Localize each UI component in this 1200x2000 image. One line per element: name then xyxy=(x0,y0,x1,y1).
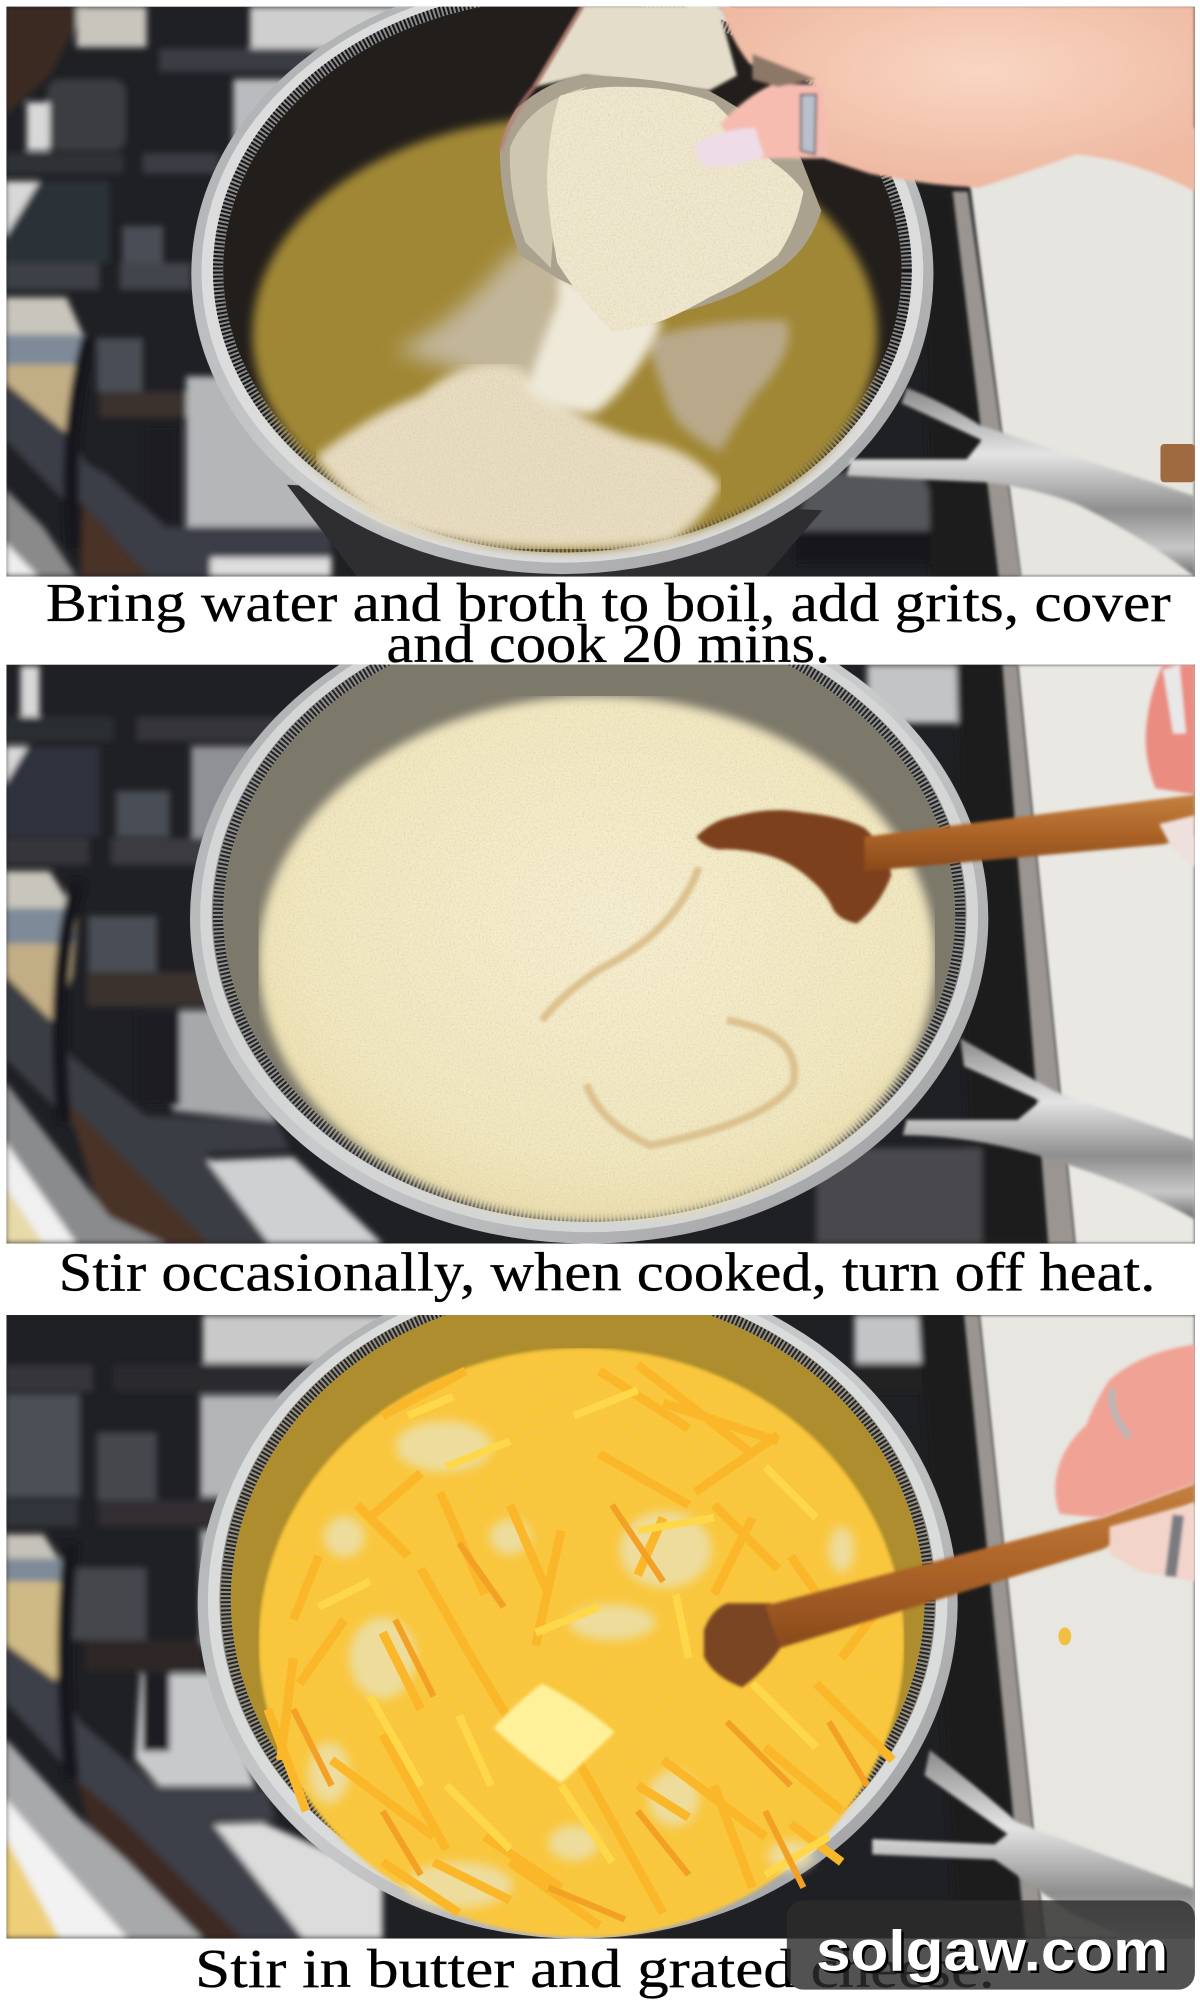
pan handle xyxy=(847,388,1195,577)
grits patches xyxy=(309,1421,854,1908)
handle xyxy=(903,1038,1195,1219)
broth xyxy=(252,118,877,551)
caption: step 1: Bring water and broth to boil, add grits, cover xyxy=(46,572,1171,633)
caption: step 2: Stir occasionally, when cooked, turn off heat. xyxy=(59,1242,1155,1303)
hand xyxy=(1055,1344,1195,1582)
watermark: solgaw.com xyxy=(819,1922,1171,1986)
caption: step 1: and cook 20 mins. xyxy=(386,613,830,674)
counter xyxy=(1018,665,1195,1244)
pot xyxy=(190,664,988,1244)
measuring cup with grits xyxy=(500,5,821,332)
panel: step 1 photo, pouring grits into broth xyxy=(5,0,1195,577)
panel: step 2 photo, stirring cooked grits xyxy=(6,664,1195,1244)
hand xyxy=(1146,665,1195,867)
cheese and grits mass xyxy=(259,1348,904,1937)
counter xyxy=(979,1315,1195,1939)
falling grits xyxy=(525,271,663,413)
butter pat xyxy=(494,1684,615,1783)
stove grate xyxy=(5,1315,1025,1939)
cooked grits xyxy=(259,696,935,1222)
caption: step 1 xyxy=(46,572,1171,674)
pot xyxy=(198,1268,958,1939)
wooden spoon xyxy=(696,795,1195,923)
stove grate xyxy=(5,5,1000,577)
caption: step 3: Stir in butter and grated cheese. xyxy=(195,1938,995,1999)
watermark: solgaw.com xyxy=(816,1919,1168,1983)
grits settling in broth xyxy=(316,364,721,549)
stir trails xyxy=(542,867,794,1145)
cheese crumb on counter xyxy=(1058,1627,1071,1645)
wooden spoon xyxy=(704,1483,1195,1687)
stove grate xyxy=(5,665,1048,1244)
hand xyxy=(695,5,1195,191)
pot xyxy=(191,0,933,577)
panel: step 3 photo, stirring in butter and cheese xyxy=(6,1315,1195,1939)
handle xyxy=(870,1749,1195,1938)
cheese shreds xyxy=(268,1365,893,1926)
watermark xyxy=(787,1900,1195,1990)
counter xyxy=(963,128,1195,577)
